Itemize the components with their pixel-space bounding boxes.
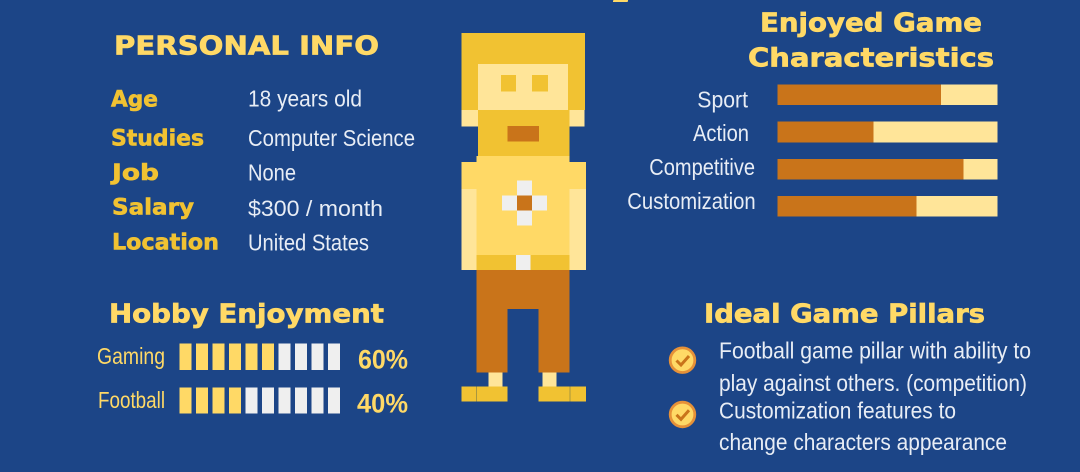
torso [476,156,570,255]
row: job: None [248,160,296,186]
bar: customization: Customization [627,188,756,214]
chart: gaming 60%: Gaming [97,343,165,369]
arms [462,189,586,270]
icon: check badge 2 [670,402,695,427]
pixel character [462,33,586,401]
face and ears [462,64,584,126]
row: job: Job [110,161,159,186]
heading: personal info: PERSONAL INFO [114,31,379,61]
ankles [489,373,556,386]
chart: football 40%: Football [98,387,165,413]
beard [478,110,570,156]
row: studies: Studies [111,126,204,151]
shirt emblem [502,180,547,226]
row: location: Location [112,230,219,255]
row: salary: $300 / month [248,196,383,221]
sleeves [462,162,586,189]
hair [462,33,585,110]
chart: football 40%: 40% [357,389,408,419]
text: pillar 2 [719,397,1007,455]
heading: enjoyed game characteristics: Characteristics [748,44,994,74]
heading: enjoyed game characteristics [748,9,994,74]
panel: personal info [110,31,415,256]
text: pillar 2: change characters appearance [719,429,1007,455]
chart: gaming 60% [97,343,408,374]
row: age: 18 years old [248,86,362,112]
belt [476,255,570,270]
bar: sport [697,84,998,113]
heading: enjoyed game characteristics: Enjoyed Game [760,9,982,39]
chart: football 40% [98,387,408,419]
text: pillar 2: Customization features to [719,397,956,423]
mouth [508,126,539,142]
bar: competitive: Competitive [649,154,755,180]
bar: action [693,120,998,146]
panel: ideal game pillars [670,300,1031,455]
bar: action: Action [693,120,749,146]
row: location [112,230,369,256]
shoes [462,386,586,401]
row: age: Age [111,88,158,113]
chart: gaming 60%: 60% [358,344,408,374]
bar: sport: Sport [697,87,749,113]
heading: ideal game pillars: Ideal Game Pillars [704,300,985,330]
row: age [111,86,362,113]
row: job [110,160,296,186]
text: pillar 1: play against others. (competition) [719,370,1027,396]
panel: enjoyed game characteristics [627,9,998,217]
row: studies: Computer Science [248,125,415,151]
eyes [501,75,548,92]
trousers [476,270,570,373]
row: salary: Salary [112,195,194,220]
row: location: United States [248,230,369,256]
panel: hobby enjoyment [97,299,408,419]
heading: hobby enjoyment: Hobby Enjoyment [109,299,384,329]
bar: customization [627,188,998,217]
bar: competitive [649,154,998,180]
row: studies [111,125,415,151]
icon: check badge 1 [670,348,695,373]
text: pillar 1: Football game pillar with ability to [719,337,1031,363]
text: pillar 1 [719,337,1031,396]
row: salary [112,195,383,221]
